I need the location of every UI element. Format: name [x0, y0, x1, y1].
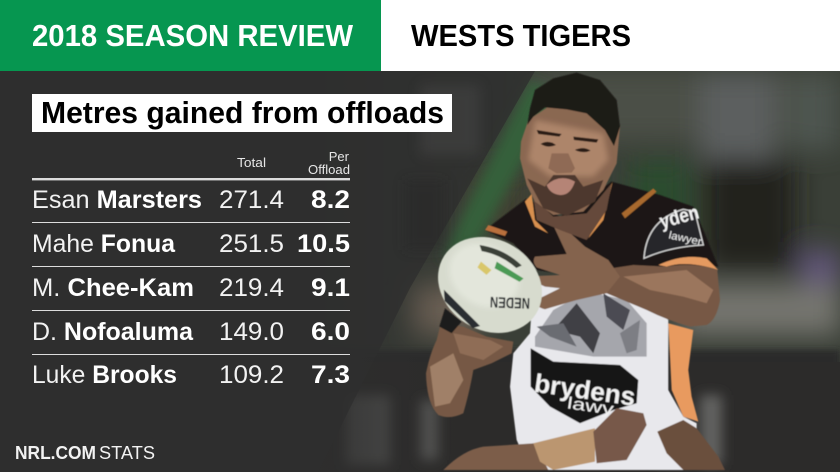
sponsor patch on chest: lawy	[566, 393, 616, 419]
eyes and brows	[537, 130, 598, 152]
table row: Luke Brooks: 109.2	[219, 361, 284, 389]
nose shadow	[548, 153, 575, 173]
table row: M. Chee-Kam	[32, 274, 350, 302]
right forearm	[600, 265, 720, 327]
sleeve sponsor badge: yden	[657, 202, 702, 233]
hand with fingers	[534, 223, 620, 309]
sponsor patch on chest	[531, 348, 638, 423]
wrist tape and grabbing hands	[443, 443, 548, 470]
table row: D. Nofoaluma: 149.0	[219, 318, 284, 346]
table row: M. Chee-Kam: M. Chee-Kam	[32, 274, 194, 302]
photo: player catching and passing the ball	[420, 73, 725, 470]
table row: Mahe Fonua: Mahe Fonua	[32, 230, 176, 258]
table: divider lines	[32, 178, 350, 355]
table row: M. Chee-Kam: 9.1	[311, 274, 350, 302]
table row: Luke Brooks: 7.3	[311, 361, 350, 389]
jersey white body	[510, 283, 697, 470]
rugby ball	[437, 236, 542, 334]
neck	[533, 183, 612, 240]
table: column headers: Offload	[308, 162, 350, 177]
table row: Esan Marsters: 271.4	[219, 186, 284, 214]
sleeve sponsor badge	[644, 202, 703, 258]
table: column headers: Total	[237, 155, 266, 170]
head / face	[520, 103, 620, 215]
beard	[527, 175, 603, 216]
hair	[527, 73, 620, 146]
table row: M. Chee-Kam: 219.4	[219, 274, 284, 302]
chart title box: Metres gained from offloads	[41, 95, 444, 130]
table row: Esan Marsters: Esan Marsters	[32, 186, 202, 214]
table row: Mahe Fonua	[32, 230, 350, 258]
rugby ball: NEDEN	[490, 293, 530, 311]
table row: D. Nofoaluma: D. Nofoaluma	[32, 318, 194, 346]
dark hoarding	[374, 348, 840, 362]
left darkening panel	[342, 278, 450, 468]
orange collar	[525, 194, 548, 233]
green strip beside the diagonal	[444, 80, 546, 254]
logo: NRL.COM STATS: STATS	[99, 443, 155, 463]
orange side panel	[668, 323, 698, 422]
player left arm	[426, 313, 513, 417]
table row: Luke Brooks	[32, 361, 350, 389]
header: team band	[381, 0, 840, 71]
lips	[547, 178, 575, 195]
table row: Esan Marsters	[32, 186, 350, 214]
sleeve sponsor badge: lawyer	[668, 230, 703, 248]
orange sleeve stripe	[658, 257, 718, 270]
logo: NRL.COM STATS: NRL.COM	[15, 443, 96, 463]
table: column headers	[237, 149, 350, 177]
header: team name: WESTS TIGERS	[411, 18, 631, 53]
table row: Mahe Fonua: 10.5	[297, 230, 350, 258]
logo: NRL.COM STATS	[15, 443, 155, 463]
jersey black shoulders	[485, 182, 718, 283]
table row: Esan Marsters: 8.2	[311, 186, 350, 214]
table row: D. Nofoaluma: 6.0	[311, 318, 350, 346]
table row: Mahe Fonua: 251.5	[219, 230, 284, 258]
photo background: blurred crowd and advertising boards	[348, 71, 840, 466]
jersey grey tiger pattern	[535, 292, 647, 357]
sponsor patch on chest: brydens	[532, 368, 637, 412]
diagonal dark wedge	[350, 71, 535, 408]
table: column headers: Per	[329, 149, 350, 164]
header: banner title: 2018 SEASON REVIEW	[32, 18, 354, 53]
table row: Luke Brooks: Luke Brooks	[32, 361, 177, 389]
header: green banner	[0, 0, 381, 71]
table row: D. Nofoaluma	[32, 318, 350, 346]
